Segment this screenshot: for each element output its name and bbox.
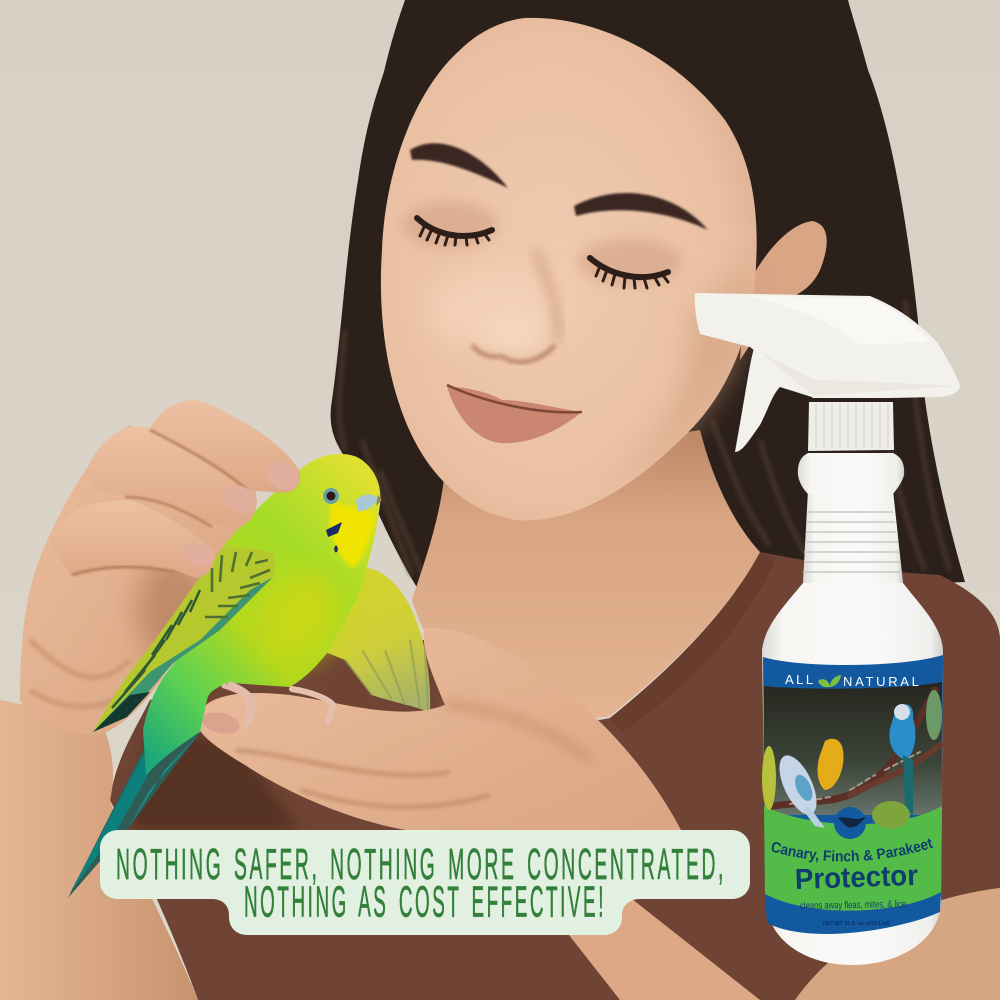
cheek marks xyxy=(326,522,342,537)
beak and cere xyxy=(356,495,379,511)
bird wing far side xyxy=(325,568,430,712)
spray bottle: Protector xyxy=(794,860,918,896)
neck and chest xyxy=(412,430,760,718)
label birds xyxy=(762,746,776,810)
branches xyxy=(772,690,940,806)
bird logo circle xyxy=(834,807,866,839)
eyebrows xyxy=(410,143,708,230)
body xyxy=(143,454,380,775)
left hand fingers over bird xyxy=(50,400,303,578)
left palm xyxy=(20,425,240,735)
spray bottle xyxy=(694,293,960,965)
spray bottle: NET WT 16 fl. oz. (473.1 ml) xyxy=(823,921,890,927)
feet xyxy=(224,684,254,728)
fingernails xyxy=(261,456,303,496)
face xyxy=(381,18,827,520)
caption banner xyxy=(100,830,750,935)
trigger xyxy=(735,345,815,452)
fingernail xyxy=(200,709,242,737)
back wing xyxy=(93,547,275,732)
mouth xyxy=(447,385,582,443)
band icon and top text: ALL xyxy=(785,672,816,687)
shoulder collar xyxy=(798,453,904,494)
parakeet xyxy=(68,454,428,898)
neck xyxy=(803,490,903,583)
ear xyxy=(740,221,827,360)
cap xyxy=(808,402,894,451)
green field xyxy=(764,806,942,911)
woman: hair back xyxy=(331,0,965,600)
product name: Canary, Finch & Parakeet xyxy=(772,838,934,862)
eyes closed with lashes xyxy=(417,218,668,288)
tail xyxy=(68,720,200,898)
bottle body xyxy=(762,583,943,965)
label picture xyxy=(764,682,942,815)
spray bottle: NATURAL xyxy=(843,674,922,689)
left arm xyxy=(0,700,198,1000)
right arm bottom xyxy=(795,888,1000,1000)
eye xyxy=(323,488,339,504)
right hand and forearm xyxy=(196,628,760,1000)
shirt xyxy=(110,552,1000,1000)
spray bottle: cleans away fleas, mites, & lice xyxy=(800,899,906,912)
hair over face edge xyxy=(368,0,770,240)
sprayer head xyxy=(695,293,960,398)
nose xyxy=(472,250,558,362)
label blue xyxy=(763,655,943,934)
far wing feathers xyxy=(345,640,428,710)
